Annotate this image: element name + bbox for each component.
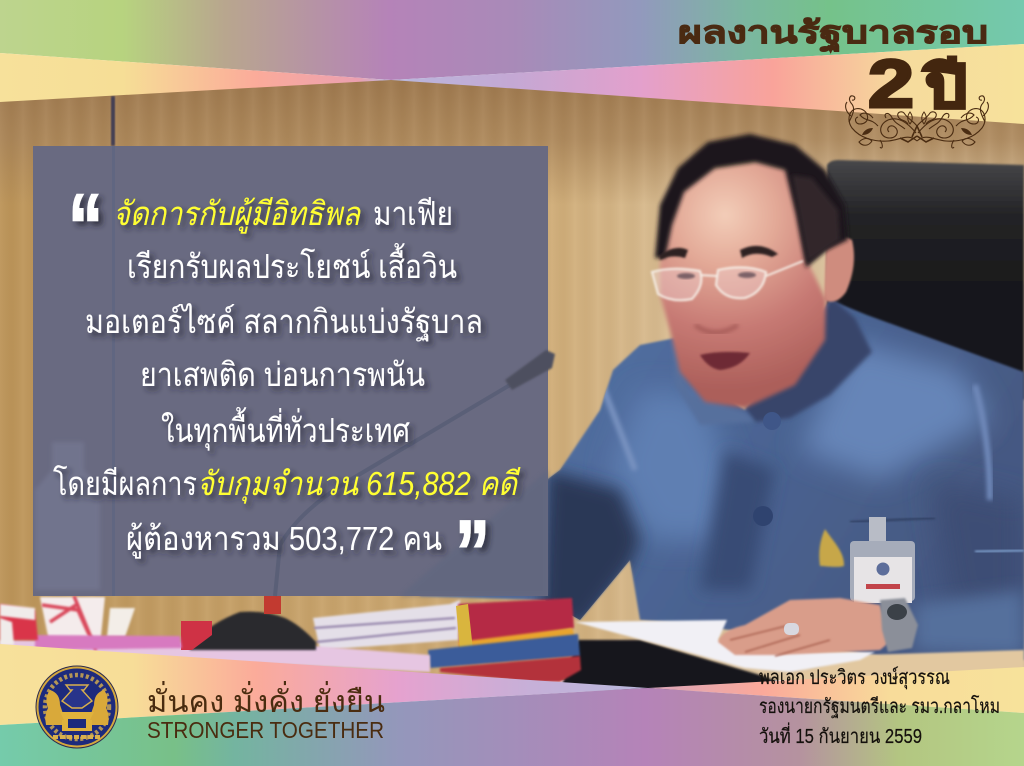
watch dial [887,604,907,620]
black binder [560,640,800,690]
title: 2 years [868,46,967,122]
slogan [147,681,385,743]
face [660,162,826,408]
photo: desk items [0,596,1024,690]
finger lines [730,625,830,656]
line 1 end: มาเฟีย [373,195,453,232]
ID badge [850,517,915,603]
microphone base [190,612,316,650]
hand [718,598,892,655]
jacket collar [745,298,872,422]
ring [784,623,799,635]
photo: seated man [420,134,1024,660]
line 2: เรียกรับผลประโยชน์ เสื้อวิน [127,243,457,285]
line 6 highlighted: จับกุมจำนวน 615,882 คดี [197,465,520,504]
title: ผลงานรัฐบาลรอบ [678,15,988,53]
hair side [792,175,840,262]
lower books [428,634,580,668]
attribution name: พลเอก ประวิตร วงษ์สุวรรณ [759,666,950,690]
jacket buttons [753,412,781,526]
paper stack [575,620,875,672]
bowl [62,685,92,708]
line 7: ผู้ต้องหารวม 503,772 คน [126,520,442,559]
line 3: มอเตอร์ไซค์ สลากกินแบ่งรัฐบาล [85,303,483,342]
desk surface right [780,650,1024,680]
government emblem [36,666,118,748]
top colour ribbons [0,0,1024,124]
slogan Thai: มั่นคง มั่งคั่ง ยั่งยืน [147,681,385,719]
title: 2 years: ปี [922,55,967,120]
white cup [107,608,135,637]
attribution date: วันที่ 15 กันยายน 2559 [759,722,922,748]
microphone head [505,350,555,390]
lions [45,690,109,725]
red box behind mic [181,621,212,650]
book page lines [314,618,456,642]
translucent quote panel [33,146,548,596]
photo: black chair [827,160,1024,400]
opening quote mark: “ [68,176,103,278]
ear [824,237,854,302]
base lettering [53,735,101,739]
eyes [677,272,756,279]
left collar [672,336,755,425]
line 4: ยาเสพติด บ่อนการพนัน [140,356,425,393]
orange book spine [458,628,576,652]
book band [456,604,473,650]
mouth [700,352,750,370]
hair [655,134,848,268]
ornament under title [846,96,988,148]
sleeve [400,470,548,596]
line 5: ในทุกพื้นที่ทั่วประเทศ [161,407,410,451]
closing quote mark: ” [455,502,490,604]
red mic connector [264,596,281,614]
pink table cloth [35,635,182,650]
watch [880,598,918,652]
napkin red trim [42,596,96,650]
gold amulet [819,529,844,567]
glass and napkin [40,597,105,646]
red books [458,598,574,650]
quote text block [53,176,520,604]
left red item [0,604,38,640]
man's jacket [420,300,1024,660]
pedestal [60,712,94,731]
left white item [0,604,35,645]
upper white book stack [313,600,460,650]
line 6 start: โดยมีผลการ [53,465,197,502]
slogan English: STRONGER TOGETHER [147,717,384,743]
nose shadow [695,325,738,332]
eyebrows [660,246,778,260]
table top left [0,640,430,672]
attribution text [759,666,1000,748]
title: 2 years: 2 [868,46,914,122]
ring lettering [45,675,109,739]
objects seen through panel [35,146,548,596]
bottom colour ribbons [0,644,1024,766]
microphone arm [275,385,510,596]
line 1 highlighted: จัดการกับผู้มีอิทธิพล [113,195,362,234]
water bottle [35,442,100,590]
wall pipe [112,146,115,596]
lower red book [440,656,581,682]
photo background: wood wall [0,80,1024,680]
glasses [652,261,803,300]
